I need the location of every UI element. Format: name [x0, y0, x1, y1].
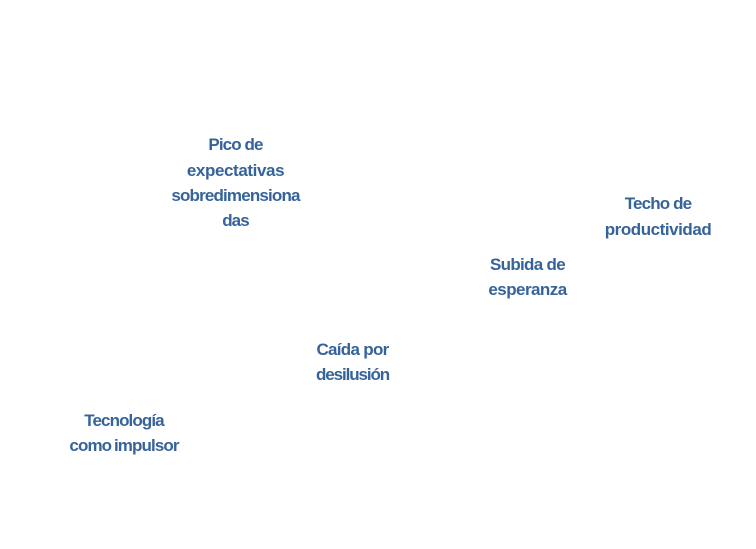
label: Tecnología como impulsor: como impulsor — [69, 436, 179, 455]
label: Techo de productividad — [605, 194, 711, 239]
label: Pico de expectativas sobredimensionadas: sobredimensiona — [171, 186, 300, 205]
label: Pico de expectativas sobredimensionadas — [171, 135, 301, 230]
label: Caída por desilusión: Caída por — [316, 340, 389, 359]
label: Subida de esperanza: esperanza — [488, 280, 567, 299]
label: Caída por desilusión — [316, 340, 390, 384]
label: Pico de expectativas sobredimensionadas: expectativas — [187, 161, 284, 180]
label: Techo de productividad: productividad — [605, 220, 711, 239]
label: Pico de expectativas sobredimensionadas: Pico de — [208, 135, 263, 154]
label: Tecnología como impulsor — [69, 411, 180, 455]
label: Subida de esperanza — [488, 255, 568, 299]
label: Subida de esperanza: Subida de — [490, 255, 565, 274]
label: Caída por desilusión: desilusión — [316, 365, 389, 384]
label: Techo de productividad: Techo de — [625, 194, 691, 213]
label: Pico de expectativas sobredimensionadas: das — [222, 211, 249, 230]
label: Tecnología como impulsor: Tecnología — [84, 411, 164, 430]
